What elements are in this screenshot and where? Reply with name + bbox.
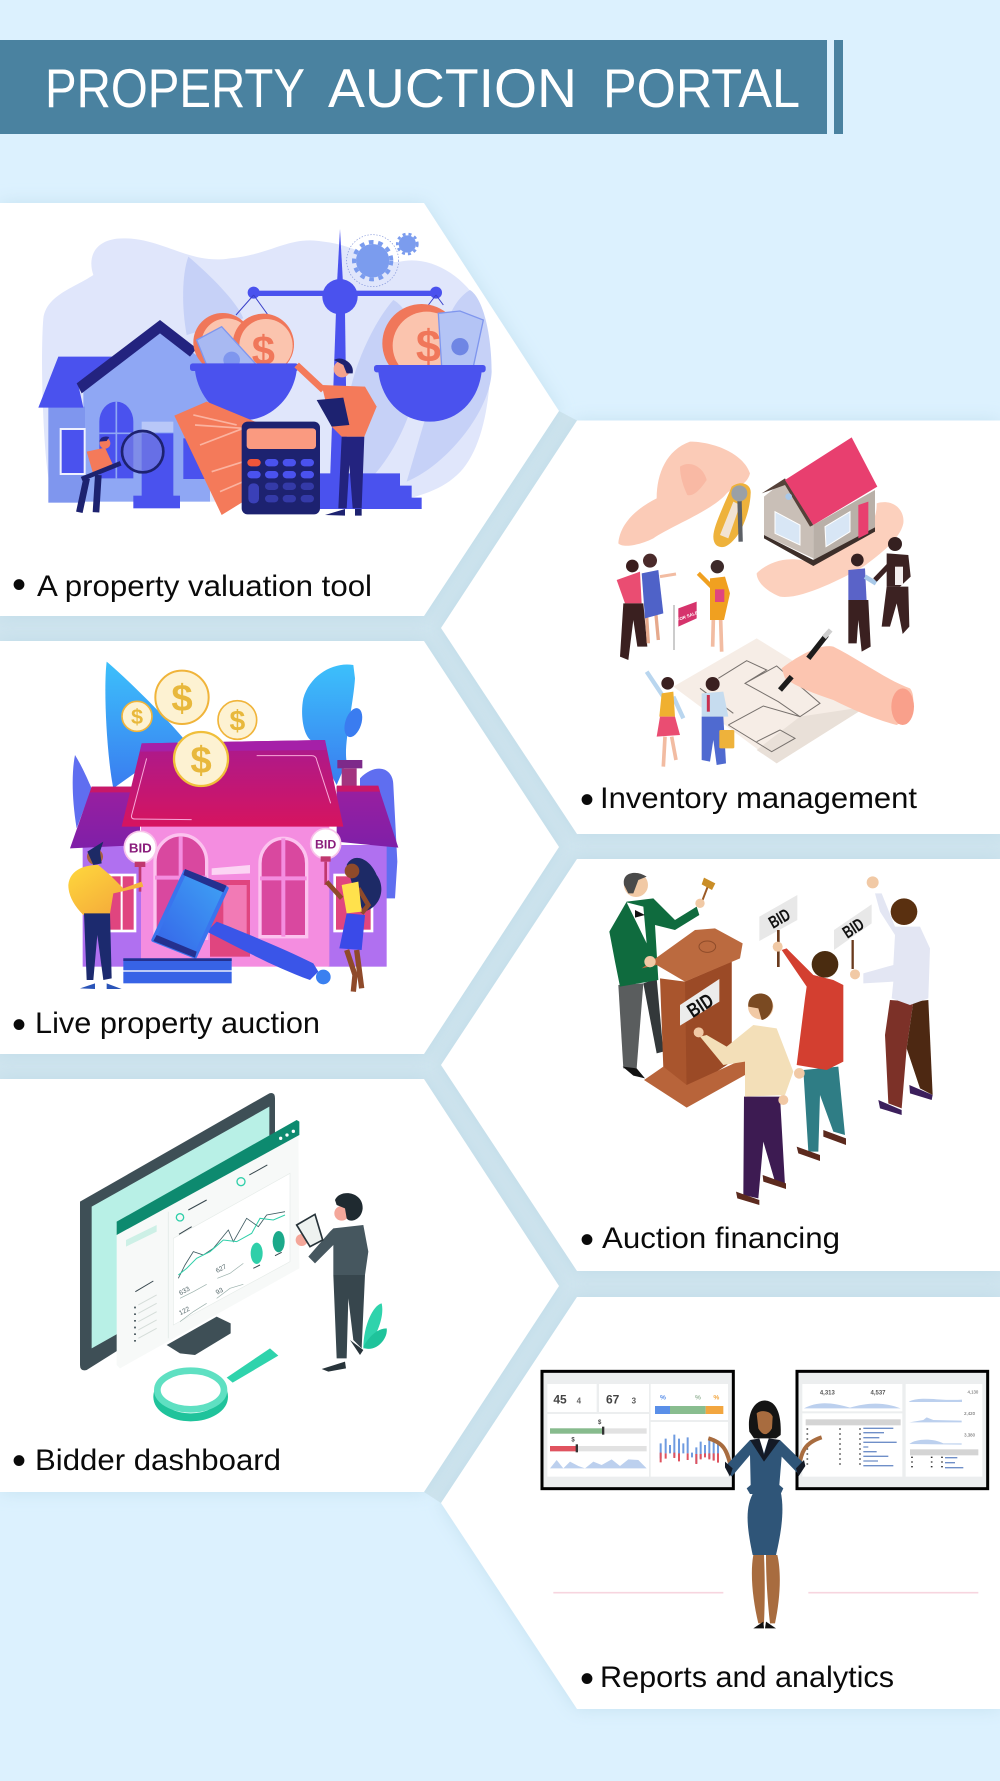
illustration: property keys, house and floor plan: FOR SALE bbox=[676, 610, 699, 622]
house bbox=[764, 480, 813, 558]
illustration: auction house with coins and gavel bbox=[68, 662, 398, 992]
label: live property auction: • bbox=[12, 1003, 26, 1047]
walls bbox=[83, 845, 143, 967]
illustration: auction house with coins and gavel: $ bbox=[171, 677, 193, 720]
man bbox=[68, 865, 143, 915]
illustration: presenter with analytics screens bbox=[542, 1371, 988, 1628]
title banner: PORTAL bbox=[603, 57, 800, 119]
panel: bidder dashboard bbox=[0, 1079, 559, 1492]
right screen: 3,380 bbox=[964, 1432, 976, 1437]
plant bbox=[363, 1303, 382, 1348]
label: inventory management: Inventory management bbox=[600, 782, 918, 815]
middle bidder bbox=[803, 1067, 845, 1152]
left screen: 4 bbox=[577, 1396, 582, 1405]
illustration: auctioneer at podium with bidders: BID bbox=[684, 990, 718, 1023]
illustration: isometric monitor dashboard: 627 bbox=[215, 1263, 228, 1275]
illustration: scales, house and calculator: $ bbox=[416, 321, 441, 372]
right screen bbox=[797, 1371, 988, 1489]
right screen: 4,130 bbox=[967, 1389, 979, 1394]
label: bidder dashboard: Bidder dashboard bbox=[35, 1444, 281, 1477]
illustration: auction house with coins and gavel: $ bbox=[131, 704, 143, 729]
label: reports and analytics bbox=[580, 1657, 894, 1701]
illustration: property keys, house and floor plan bbox=[617, 437, 914, 767]
illustration: isometric monitor dashboard bbox=[80, 1093, 387, 1417]
coins bbox=[193, 313, 294, 364]
lower palm bbox=[757, 502, 903, 597]
illustration: auction house with coins and gavel: BID bbox=[315, 837, 336, 851]
roofs bbox=[70, 787, 140, 848]
label: a property valuation tool bbox=[12, 563, 372, 607]
illustration: auction house with coins and gavel: $ bbox=[229, 705, 245, 737]
panel: inventory management bbox=[441, 420, 1000, 834]
illustration: auctioneer at podium with bidders bbox=[609, 873, 933, 1205]
left screen: 45 bbox=[553, 1393, 567, 1407]
label: bidder dashboard bbox=[12, 1439, 281, 1483]
person bbox=[333, 1275, 365, 1358]
title banner: PROPERTY bbox=[45, 57, 305, 119]
label: reports and analytics: • bbox=[580, 1657, 594, 1701]
label: a property valuation tool: A property valuation tool bbox=[37, 570, 372, 603]
auctioneer bbox=[643, 978, 663, 1053]
person with tablet bbox=[338, 437, 364, 508]
label: a property valuation tool: • bbox=[12, 563, 26, 607]
floor plan paper bbox=[673, 638, 867, 763]
illustration: isometric monitor dashboard: 122 bbox=[178, 1306, 191, 1317]
house bbox=[83, 328, 210, 502]
left screen: $ bbox=[598, 1420, 602, 1426]
title banner bbox=[0, 40, 843, 134]
label: bidder dashboard: • bbox=[12, 1439, 26, 1483]
panel: reports and analytics bbox=[441, 1297, 1000, 1709]
for sale sign bbox=[671, 605, 677, 650]
magnifier and small person bbox=[87, 448, 113, 474]
illustration: auctioneer at podium with bidders: BID bbox=[765, 904, 794, 932]
agent bbox=[711, 560, 724, 573]
front bidder bbox=[743, 1097, 785, 1198]
connecting channels between panels bbox=[0, 411, 1000, 1503]
title banner: AUCTION bbox=[328, 57, 577, 119]
man with briefcase bbox=[706, 677, 720, 691]
gavel bbox=[207, 922, 318, 980]
panel: property valuation tool bbox=[0, 203, 559, 616]
right screen: 4,537 bbox=[871, 1390, 886, 1396]
label: auction financing: • bbox=[580, 1218, 594, 1262]
label: inventory management bbox=[580, 778, 918, 822]
magnifier bbox=[227, 1348, 278, 1383]
label: inventory management: • bbox=[580, 778, 594, 822]
label: reports and analytics: Reports and analytics bbox=[600, 1661, 894, 1694]
handshake bbox=[851, 554, 864, 566]
podium bbox=[660, 962, 732, 1092]
label: auction financing bbox=[580, 1218, 840, 1262]
illustration: isometric monitor dashboard: 93 bbox=[215, 1287, 225, 1296]
illustration: auctioneer at podium with bidders: BID bbox=[839, 914, 868, 942]
clipboard bbox=[174, 402, 263, 515]
label: live property auction: Live property auction bbox=[35, 1007, 320, 1040]
right screen: 4,313 bbox=[820, 1390, 835, 1396]
right bidder bbox=[885, 1000, 913, 1108]
label: auction financing: Auction financing bbox=[602, 1222, 840, 1255]
presenter bbox=[708, 1401, 822, 1628]
windows bbox=[155, 835, 207, 938]
left screen bbox=[542, 1371, 733, 1489]
bid paddles bbox=[124, 831, 156, 892]
panel: live property auction bbox=[0, 641, 559, 1054]
coins: $ bbox=[252, 327, 275, 374]
woman bbox=[347, 858, 381, 912]
left screen: 67 bbox=[606, 1393, 620, 1407]
hand drawing bbox=[782, 646, 913, 725]
illustration: scales, house and calculator bbox=[38, 229, 492, 516]
right screen: 2,420 bbox=[964, 1411, 976, 1416]
illustration: isometric monitor dashboard: 633 bbox=[178, 1286, 191, 1297]
left screen: $ bbox=[571, 1437, 575, 1443]
couple bbox=[626, 560, 639, 572]
illustration: auction house with coins and gavel: $ bbox=[190, 739, 212, 782]
bid paddles: BID bbox=[129, 840, 152, 855]
left screen: % bbox=[695, 1394, 701, 1401]
left screen: 3 bbox=[632, 1396, 637, 1405]
coins bbox=[155, 671, 209, 724]
calculator bbox=[242, 422, 320, 514]
child bbox=[661, 677, 674, 690]
label: live property auction bbox=[12, 1003, 320, 1047]
left screen: % bbox=[660, 1394, 666, 1401]
panel: auction financing bbox=[441, 859, 1000, 1271]
left screen: % bbox=[713, 1394, 719, 1401]
